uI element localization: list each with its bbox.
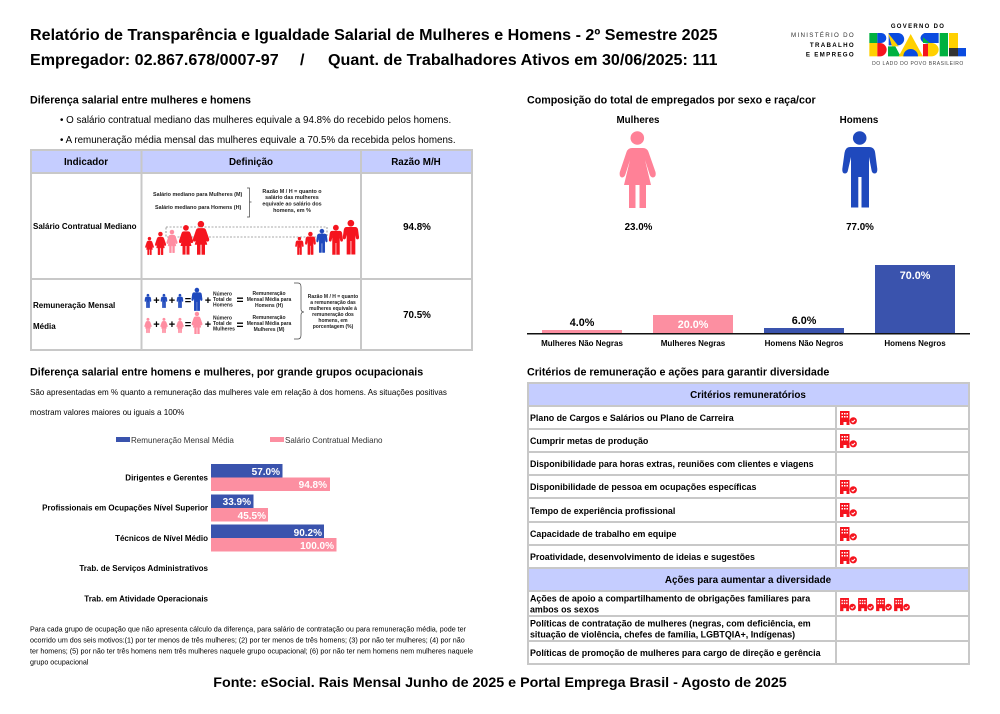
bar chart: grupos ocupacionais: 57.0%	[252, 467, 280, 478]
table header	[64, 157, 441, 168]
table header: Razão M/H	[391, 157, 441, 168]
pictogram: homens	[840, 115, 879, 233]
row: salário contratual mediano: 94.8%	[403, 222, 431, 233]
title: Relatório de Transparência e Igualdade Salarial de Mulheres e Homens - 2º Semestre 2025	[30, 26, 718, 44]
header: ações: Ações para aumentar a diversidade	[665, 575, 832, 586]
rows: critérios: Proatividade, desenvolvimento de ideias e sugestões	[530, 552, 755, 562]
title: Quant. de Trabalhadores Ativos em 30/06/2025: 111	[328, 51, 717, 69]
text block: explicação: São apresentadas em % quanto a remuneração das mulheres vale em relação à dos homens. As situações positivas	[30, 388, 447, 397]
panel: tabela indicadores	[30, 149, 473, 351]
diagram: remuneração média: Número	[213, 292, 232, 298]
bar chart: sexo e raça: Mulheres Negras	[661, 339, 726, 348]
text block: resumo	[60, 115, 456, 146]
diagram: remuneração média: =	[236, 293, 244, 307]
diagram: remuneração média: Mulheres	[213, 326, 235, 332]
logo: ministério do trabalho e emprego: E EMPREGO	[806, 52, 855, 58]
logo: ministério do trabalho e emprego: MINISTÉRIO DO	[791, 32, 855, 39]
diagram: remuneração média: porcentagem (%)	[313, 324, 354, 330]
legend: Salário Contratual Mediano	[285, 436, 383, 445]
rows: ações: Ações de apoio a compartilhamento de obrigações familiares para	[530, 594, 810, 604]
diagram: remuneração média: Total de	[213, 321, 232, 327]
diagram: remuneração média: Remuneração	[252, 315, 286, 321]
diagram: remuneração média: +	[153, 295, 160, 307]
pictogram: mulheres: Mulheres	[616, 115, 660, 126]
text block: explicação	[30, 388, 447, 417]
legend: Remuneração Mensal Média	[131, 436, 234, 445]
diagram: remuneração média: Remuneração	[252, 291, 286, 297]
diagram: remuneração média: +	[153, 319, 160, 331]
diagram: remuneração média: Total de	[213, 297, 232, 303]
diagram: remuneração média: Homens	[213, 302, 233, 308]
bar chart: grupos ocupacionais: 45.5%	[238, 511, 266, 522]
rows: ações	[530, 594, 821, 658]
bar chart: sexo e raça: 20.0%	[678, 319, 709, 331]
icons: critérios	[840, 411, 857, 564]
pictogram: mulheres	[616, 115, 660, 233]
diagram: remuneração média: Razão M / H = quanto	[308, 294, 358, 300]
bar chart: sexo e raça: 4.0%	[570, 317, 595, 329]
icon: man	[842, 131, 877, 208]
logo: governo do brasil: DO LADO DO POVO BRASILEIRO	[872, 61, 964, 67]
text block: nota: grupo ocupacional	[30, 658, 89, 666]
bar chart: grupos ocupacionais: Trab. de Serviços Administrativos	[79, 564, 209, 573]
diagram: salário mediano: Razão M / H = quanto o	[262, 189, 322, 195]
rows: ações: ambos os sexos	[530, 604, 599, 614]
pictogram: mulheres: 23.0%	[625, 222, 653, 233]
logo: ministério do trabalho e emprego: TRABALHO	[810, 42, 855, 49]
text block: resumo: • A remuneração média mensal das mulheres equivale a 70.5% da recebida pelos homens.	[60, 135, 456, 146]
rows: critérios: Disponibilidade de pessoa em ocupações específicas	[530, 482, 756, 492]
logo: governo do brasil	[869, 24, 966, 67]
bar chart: grupos ocupacionais: 94.8%	[299, 480, 327, 491]
rows: critérios	[530, 413, 814, 562]
diagram: remuneração média: +	[169, 319, 175, 331]
diagram: remuneração média: =	[185, 295, 191, 307]
bar chart: sexo e raça: Homens Não Negros	[765, 339, 844, 348]
logo: ministério do trabalho e emprego	[791, 32, 855, 58]
bar chart: grupos ocupacionais	[42, 464, 336, 604]
table header: Indicador	[64, 157, 108, 168]
diagram: salário mediano: Salário mediano para Homens (H)	[155, 205, 241, 211]
logo: governo do brasil: GOVERNO DO	[891, 24, 945, 30]
row: salário contratual mediano	[33, 222, 431, 233]
bar chart: grupos ocupacionais: Profissionais em Ocupações Nível Superior	[42, 504, 208, 512]
bar chart: grupos ocupacionais: Técnicos de Nível Médio	[115, 534, 208, 543]
diagram: remuneração média: +	[205, 319, 211, 331]
bar chart: grupos ocupacionais: 33.9%	[223, 497, 251, 508]
diagram: salário mediano	[145, 188, 359, 255]
text block: nota	[30, 626, 473, 666]
diagram: remuneração média: Mensal Média para	[247, 297, 291, 303]
rows: critérios: Capacidade de trabalho em equipe	[530, 529, 677, 539]
text block: resumo: • O salário contratual mediano das mulheres equivale a 94.8% do recebido pelos homens.	[60, 115, 451, 126]
rows: critérios: Plano de Cargos e Salários ou Plano de Carreira	[530, 413, 734, 423]
bar chart: sexo e raça: 70.0%	[900, 270, 931, 282]
diagram: remuneração média: Mensal Média para	[247, 321, 291, 327]
text block: nota: ocorrido um dos seis motivos:(1) por ter menos de três mulheres; (2) por ter menos de três homens; (3) por não ter mulheres; (4) por não	[30, 636, 465, 644]
title	[30, 26, 718, 69]
legend	[116, 436, 383, 445]
icons: ações	[840, 598, 910, 611]
heading: diferença salarial: Diferença salarial entre mulheres e homens	[30, 94, 251, 106]
bar chart: grupos ocupacionais: 90.2%	[294, 528, 322, 539]
pictogram: homens: Homens	[840, 115, 879, 126]
table header: Definição	[229, 157, 273, 168]
diagram: remuneração média: a remuneração das	[310, 300, 356, 306]
rows: ações: Políticas de contratação de mulheres (negras, com deficiência, em	[530, 618, 811, 628]
title: Empregador: 02.867.678/0007-97	[30, 51, 279, 69]
diagram: remuneração média: remuneração dos	[312, 312, 354, 318]
row: remuneração mensal média: 70.5%	[403, 310, 431, 321]
bar chart: grupos ocupacionais: 100.0%	[300, 541, 334, 552]
heading: critérios: Critérios de remuneração e ações para garantir diversidade	[527, 366, 829, 378]
diagram: salário mediano: equivale ao salário dos	[262, 202, 322, 208]
diagram: remuneração média: +	[205, 295, 211, 307]
footer source: Fonte: eSocial. Rais Mensal Junho de 2025 e Portal Emprega Brasil - Agosto de 2025	[213, 675, 787, 691]
row: remuneração mensal média: Remuneração Mensal	[33, 301, 115, 310]
row: salário contratual mediano: Salário Contratual Mediano	[33, 222, 137, 231]
rows: critérios: Cumprir metas de produção	[530, 436, 649, 446]
diagram: salário mediano: Salário mediano para Mulheres (M)	[153, 192, 242, 198]
icon: woman	[620, 131, 656, 208]
diagram: remuneração média: Número	[213, 316, 232, 322]
diagram: remuneração média: Homens (H)	[255, 303, 283, 309]
rows: critérios: Disponibilidade para horas extras, reuniões com clientes e viagens	[530, 459, 814, 469]
diagram: salário mediano: salário das mulheres	[265, 195, 319, 201]
header: critérios remuneratórios: Critérios remuneratórios	[690, 390, 806, 401]
diagram: salário mediano: homens, em %	[273, 208, 311, 214]
row: remuneração mensal média: Média	[33, 322, 56, 331]
diagram: remuneração média: +	[169, 295, 175, 307]
rows: ações: Políticas de promoção de mulheres para cargo de direção e gerência	[530, 648, 821, 658]
diagram: remuneração média	[145, 283, 358, 339]
text block: nota: Para cada grupo de ocupação que não apresenta cálculo da diferença, para salário de contratação ou para remuneração média, pode ter	[30, 626, 467, 634]
pictogram: homens: 77.0%	[846, 222, 874, 233]
rows: critérios: Tempo de experiência profissional	[530, 506, 675, 516]
diagram: remuneração média: =	[236, 318, 244, 332]
text block: explicação: mostram valores maiores ou iguais a 100%	[30, 408, 184, 417]
bar chart: grupos ocupacionais: Dirigentes e Gerentes	[125, 474, 209, 482]
panel: tabela critérios	[527, 382, 970, 665]
bar chart: grupos ocupacionais: Trab. em Atividade Operacionais	[84, 594, 209, 604]
bar chart: sexo e raça: 6.0%	[792, 315, 817, 327]
diagram: remuneração média: Mulheres (M)	[254, 327, 285, 333]
heading: composição: Composição do total de empregados por sexo e raça/cor	[527, 94, 816, 106]
title: /	[300, 51, 305, 69]
rows: ações: situação de violência, chefes de família, LGBTQIA+, Indígenas)	[530, 630, 795, 640]
diagram: remuneração média: =	[185, 319, 191, 331]
bar chart: sexo e raça: Mulheres Não Negras	[541, 339, 623, 348]
diagram: remuneração média: homens, em	[318, 318, 348, 324]
row: remuneração mensal média	[33, 301, 431, 331]
bar chart: sexo e raça	[527, 265, 970, 348]
heading: diferença por grupos: Diferença salarial entre homens e mulheres, por grande grupos ocupacionais	[30, 366, 423, 378]
bar chart: sexo e raça: Homens Negros	[884, 339, 946, 348]
diagram: remuneração média: mulheres equivale à	[309, 306, 357, 312]
text block: nota: ter homens; (5) por não ter três homens nem três mulheres naquele grupo ocupacional; (6) por não ter nem homens nem mulheres naquele	[30, 648, 473, 656]
